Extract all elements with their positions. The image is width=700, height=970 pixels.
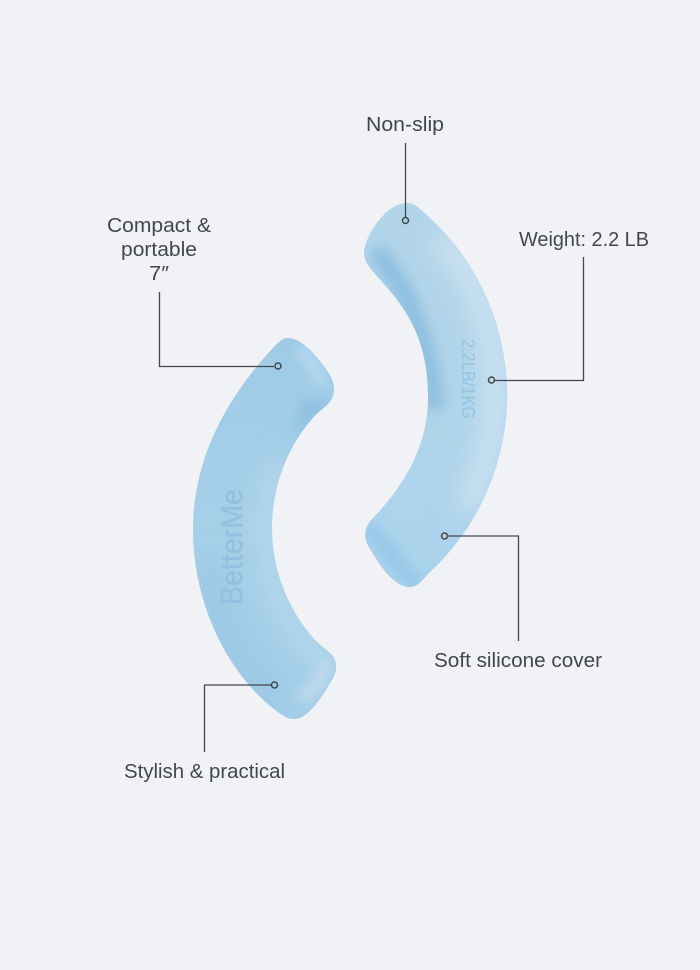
callout: Compact and portable: portable [121,239,197,261]
callout: Compact and portable [107,215,281,369]
infographic canvas [108,116,648,782]
callout: Non-slip [366,114,444,224]
label: 2.2LB/1KG embossed text: 2.2LB/1KG [458,339,478,419]
left arc weight [193,338,336,719]
callout: Compact and portable: Compact & [107,215,212,237]
callout: Weight [488,229,649,383]
callout: Stylish and practical: Stylish & practical [124,761,285,783]
callout: Stylish and practical [124,682,285,783]
callout: Soft silicone cover [434,533,602,672]
right arc weight [364,203,508,587]
callout: Soft silicone cover: Soft silicone cover [434,650,602,672]
callout: Compact and portable: 7″ [149,263,169,285]
callout: Weight: Weight: 2.2 LB [519,229,649,251]
label: BetterMe embossed logo: BetterMe [214,489,249,605]
callout: Non-slip: Non-slip [366,114,444,136]
